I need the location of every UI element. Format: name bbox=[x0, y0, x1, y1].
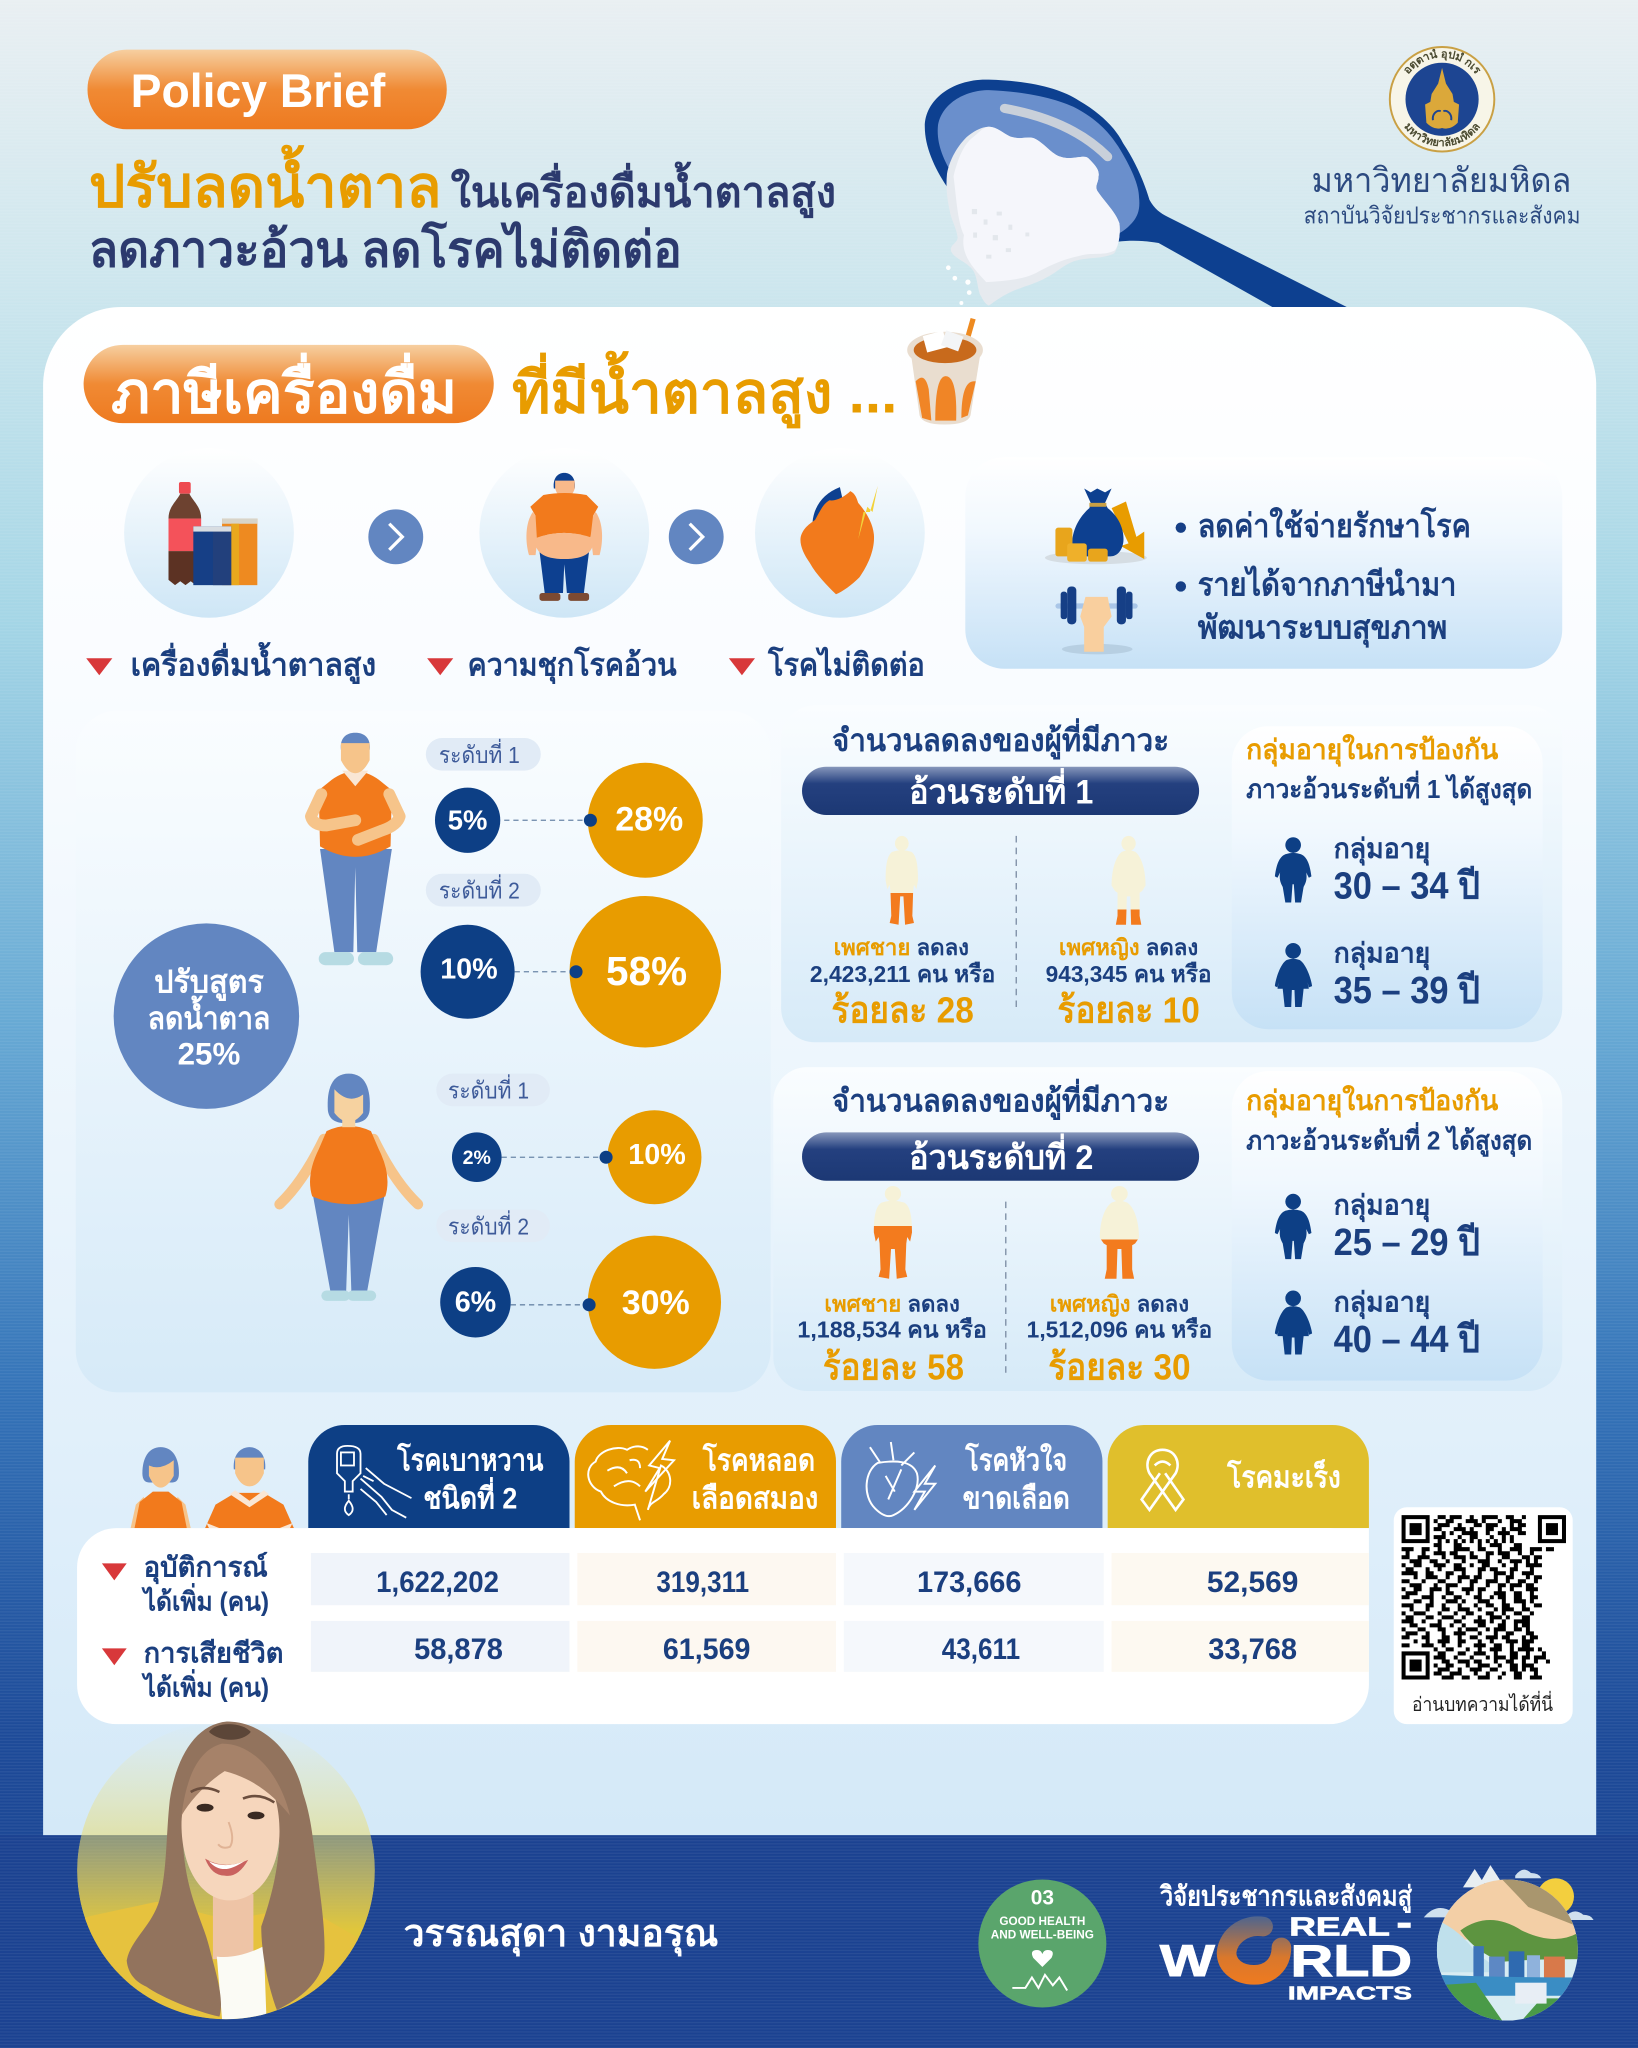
table tab: diabetes: โรคเบาหวาน bbox=[396, 1442, 544, 1478]
text: female level 2 result: 1,512,096 คน หรือ bbox=[1027, 1316, 1212, 1342]
title: ในเครื่องดื่มน้ำตาลสูง bbox=[451, 160, 836, 218]
table tab: ischemic heart disease: ขาดเลือด bbox=[963, 1483, 1070, 1516]
illustration: spoon with sugar bbox=[925, 80, 1347, 307]
QR code card bbox=[1394, 1507, 1573, 1724]
text: male level 2 result bbox=[797, 1291, 987, 1387]
badge: SDG 3: 03 bbox=[1031, 1886, 1054, 1909]
panel: age groups level 2: 40 – 44 ปี bbox=[1334, 1319, 1480, 1361]
author photo bbox=[77, 1721, 375, 2019]
row: mortality: 43,611 bbox=[942, 1633, 1020, 1666]
chart: female level 1 2 to 10 bbox=[452, 1110, 701, 1204]
table tab: ischemic heart disease bbox=[841, 1425, 1102, 1528]
text: male level 2 result: 1,188,534 คน หรือ bbox=[797, 1316, 987, 1342]
heading: beverage tax: ภาษีเครื่องดื่ม bbox=[111, 353, 457, 426]
arrow: obesity to NCDs bbox=[669, 509, 724, 564]
icon: brain with bolt bbox=[588, 1441, 674, 1520]
chain: NCD circle bbox=[755, 448, 925, 618]
row: incidence: 52,569 bbox=[1207, 1566, 1298, 1599]
text: male level 2 result: เพศชาย ลดลง bbox=[824, 1291, 960, 1316]
table tab: cancer: โรคมะเร็ง bbox=[1226, 1459, 1341, 1495]
heading: level 1 bbox=[802, 718, 1199, 815]
callout: 25 percent reformulation: ลดน้ำตาล bbox=[148, 995, 270, 1036]
logo: Mahidol University seal bbox=[1388, 46, 1496, 152]
icon: heart bbox=[800, 486, 878, 594]
text: male level 1 result: ร้อยละ 28 bbox=[831, 990, 974, 1031]
icon: bottle and cans bbox=[169, 482, 257, 585]
icon: anatomical heart bbox=[867, 1442, 935, 1516]
callout: 25 percent reformulation: ปรับสูตร bbox=[154, 965, 264, 1002]
logo: Real-World Impacts: REAL bbox=[1289, 1912, 1390, 1942]
chart: male level 2 10 to 58: 58% bbox=[606, 948, 687, 994]
badge: SDG 3: AND WELL-BEING bbox=[991, 1928, 1094, 1941]
panel: age groups level 2: กลุ่มอายุในการป้องกัน bbox=[1246, 1084, 1498, 1118]
row: incidence: 173,666 bbox=[917, 1566, 1021, 1599]
chart: female level 1 2 to 10: 10% bbox=[628, 1139, 686, 1171]
icon: money bag and coins bbox=[1045, 488, 1147, 564]
panel: age groups level 1: กลุ่มอายุ bbox=[1334, 833, 1430, 866]
panel: age groups level 2: กลุ่มอายุ bbox=[1334, 1286, 1430, 1319]
row: incidence: อุบัติการณ์ bbox=[144, 1551, 268, 1584]
author name: วรรณสุดา งามอรุณ bbox=[404, 1913, 718, 1957]
footer band bbox=[0, 1835, 1638, 2048]
title: ปรับลดน้ำตาล bbox=[89, 144, 442, 219]
chart: male level 1 5 to 28 bbox=[435, 763, 703, 878]
callout: 25 percent reformulation: 25% bbox=[178, 1036, 240, 1071]
heading: level 2: จำนวนลดลงของผู้ที่มีภาวะ bbox=[832, 1079, 1169, 1121]
heading: level 1: จำนวนลดลงของผู้ที่มีภาวะ bbox=[832, 718, 1169, 760]
logo: Real-World Impacts: W bbox=[1160, 1937, 1215, 1986]
arrow: drinks to obesity bbox=[368, 509, 423, 564]
icon: female silhouette level 2 bbox=[1100, 1186, 1139, 1279]
icon: hand lifting dumbbell bbox=[1055, 586, 1138, 654]
callout: 25 percent reformulation bbox=[114, 923, 299, 1109]
text: benefit 2 bbox=[1176, 566, 1456, 649]
pill: male level 2 bbox=[426, 874, 541, 906]
logo: Mahidol University seal: อตฺตานํ อุปมํ กเร bbox=[1404, 48, 1480, 74]
text: male level 1 result bbox=[810, 935, 995, 1031]
chart: female level 1 2 to 10: 2% bbox=[463, 1147, 491, 1169]
QR code card: อ่านบทความได้ที่นี่ bbox=[1412, 1691, 1553, 1716]
pill: female level 1: ระดับที่ 1 bbox=[448, 1073, 529, 1103]
row: mortality: 33,768 bbox=[1208, 1633, 1297, 1666]
icon: ribbon bbox=[1142, 1450, 1183, 1510]
chain: obesity circle bbox=[479, 448, 649, 618]
chart: male level 2 10 to 58: 10% bbox=[440, 953, 498, 985]
pill: male level 1 bbox=[426, 738, 541, 771]
text: benefit 1: ลดค่าใช้จ่ายรักษาโรค bbox=[1198, 506, 1471, 544]
panel: age groups level 2: กลุ่มอายุ bbox=[1334, 1190, 1430, 1223]
text: female level 2 result bbox=[1027, 1291, 1212, 1387]
row: incidence: ได้เพิ่ม (คน) bbox=[141, 1582, 269, 1616]
illustration: woman bbox=[280, 1074, 418, 1301]
row: mortality: การเสียชีวิต bbox=[144, 1638, 283, 1669]
panel: main content bbox=[43, 307, 1596, 1835]
illustration: globe of society bbox=[1424, 1865, 1594, 2021]
illustration: couple above table bbox=[131, 1447, 294, 1528]
labels: decreases chain bbox=[86, 641, 925, 684]
table tab: ischemic heart disease: โรคหัวใจ bbox=[964, 1442, 1067, 1478]
panel: age groups level 1 bbox=[1232, 726, 1543, 1029]
logo: Mahidol University seal: มหาวิทยาลัยมหิดล bbox=[1404, 123, 1480, 146]
row: incidence: 1,622,202 bbox=[376, 1566, 499, 1599]
icon: female silhouette level 1 bbox=[1112, 836, 1146, 925]
badge: SDG 3 bbox=[978, 1880, 1106, 2008]
panel: age groups level 1: ภาวะอ้วนระดับที่ 1 ได้สูงสุด bbox=[1246, 770, 1532, 806]
chain: high-sugar drinks circle bbox=[124, 448, 294, 618]
table tab: stroke: เลือดสมอง bbox=[692, 1483, 818, 1516]
text: benefit 2: พัฒนาระบบสุขภาพ bbox=[1198, 609, 1447, 649]
labels: decreases chain: โรคไม่ติดต่อ bbox=[767, 645, 925, 682]
policy brief badge: Policy Brief bbox=[131, 64, 386, 117]
icon: male silhouette level 2 bbox=[874, 1186, 912, 1279]
text: female level 1 result: 943,345 คน หรือ bbox=[1046, 961, 1212, 987]
chart: female level 2 6 to 30: 30% bbox=[622, 1284, 690, 1322]
panel: obesity level 1 bbox=[781, 705, 1562, 1042]
text: male level 1 result: 2,423,211 คน หรือ bbox=[810, 961, 995, 987]
icon: QR code bbox=[1402, 1515, 1566, 1680]
panel: benefits bbox=[965, 457, 1562, 669]
text: male level 1 result: เพศชาย ลดลง bbox=[834, 935, 969, 960]
table tab: diabetes: ชนิดที่ 2 bbox=[423, 1477, 517, 1516]
labels: decreases chain: เครื่องดื่มน้ำตาลสูง bbox=[131, 641, 376, 684]
row: mortality: 58,878 bbox=[414, 1633, 503, 1666]
panel: age groups level 1: กลุ่มอายุในการป้องกัน bbox=[1246, 733, 1498, 767]
table tab: diabetes bbox=[308, 1425, 570, 1528]
text: male level 2 result: ร้อยละ 58 bbox=[823, 1346, 964, 1387]
pill: female level 2: ระดับที่ 2 bbox=[448, 1209, 529, 1239]
panel: age groups level 2 bbox=[1232, 1071, 1543, 1381]
icon: glucose meter and hand bbox=[337, 1446, 411, 1518]
text: benefit 2: รายได้จากภาษีนำมา bbox=[1198, 566, 1456, 603]
panel: age groups level 1: 30 – 34 ปี bbox=[1334, 866, 1480, 908]
illustration: man bbox=[311, 733, 400, 965]
table tab: cancer bbox=[1108, 1425, 1369, 1528]
pill: male level 1: ระดับที่ 1 bbox=[439, 738, 520, 768]
table: incidence and mortality bbox=[77, 1528, 1369, 1724]
text: female level 2 result: เพศหญิง ลดลง bbox=[1050, 1291, 1189, 1317]
text: female level 2 result: ร้อยละ 30 bbox=[1048, 1346, 1191, 1387]
row: incidence bbox=[102, 1551, 1369, 1616]
heading: beverage tax: ที่มีน้ำตาลสูง ... bbox=[512, 351, 897, 429]
row: mortality bbox=[102, 1621, 1369, 1703]
row: mortality: 61,569 bbox=[663, 1633, 750, 1666]
heading: beverage tax bbox=[84, 345, 897, 429]
heading: level 2: อ้วนระดับที่ 2 bbox=[909, 1133, 1093, 1177]
institution name: มหาวิทยาลัยมหิดล bbox=[1311, 162, 1571, 200]
icon: obese man bbox=[526, 473, 602, 601]
panel: reformulation scenario bbox=[76, 711, 771, 1392]
institution name bbox=[1304, 162, 1581, 228]
chart: male level 1 5 to 28: 28% bbox=[615, 801, 683, 839]
pill: female level 2 bbox=[436, 1209, 550, 1242]
chart: female level 2 6 to 30 bbox=[440, 1236, 721, 1369]
panel: obesity level 2 bbox=[773, 1067, 1562, 1391]
heading: level 1: อ้วนระดับที่ 1 bbox=[909, 767, 1093, 811]
panel: age groups level 1: 35 – 39 ปี bbox=[1334, 970, 1480, 1012]
chart: male level 1 5 to 28: 5% bbox=[448, 804, 487, 835]
text: female level 1 result bbox=[1046, 935, 1212, 1031]
panel: age groups level 1: กลุ่มอายุ bbox=[1334, 938, 1430, 971]
institution name: สถาบันวิจัยประชากรและสังคม bbox=[1304, 202, 1581, 228]
chart: male level 2 10 to 58 bbox=[421, 896, 721, 1048]
policy brief badge bbox=[88, 50, 447, 129]
icon: male silhouette level 1 bbox=[886, 836, 918, 925]
chart: female level 2 6 to 30: 6% bbox=[455, 1286, 496, 1318]
pill: female level 1 bbox=[436, 1073, 550, 1106]
title: ลดภาวะอ้วน ลดโรคไม่ติดต่อ bbox=[89, 219, 682, 277]
panel: age groups level 2: 25 – 29 ปี bbox=[1334, 1222, 1480, 1264]
icon: iced drink cup bbox=[907, 319, 983, 424]
logo: Real-World Impacts: RLD bbox=[1291, 1937, 1412, 1986]
row: incidence: 319,311 bbox=[656, 1566, 749, 1599]
logo: Real-World Impacts: วิจัยประชากรและสังคมสู่ bbox=[1159, 1881, 1412, 1914]
table tab: stroke bbox=[575, 1425, 836, 1528]
panel: age groups level 2: ภาวะอ้วนระดับที่ 2 ได้สูงสุด bbox=[1246, 1121, 1532, 1157]
pill: male level 2: ระดับที่ 2 bbox=[439, 874, 520, 904]
title bbox=[89, 144, 836, 277]
text: female level 1 result: เพศหญิง ลดลง bbox=[1059, 935, 1198, 961]
badge: SDG 3: GOOD HEALTH bbox=[999, 1915, 1085, 1928]
labels: decreases chain: ความชุกโรคอ้วน bbox=[468, 645, 677, 684]
heading: level 2 bbox=[802, 1079, 1199, 1181]
row: mortality: ได้เพิ่ม (คน) bbox=[141, 1669, 269, 1703]
table tab: stroke: โรคหลอด bbox=[702, 1442, 815, 1478]
text: female level 1 result: ร้อยละ 10 bbox=[1057, 990, 1200, 1031]
logo: Real-World Impacts bbox=[1159, 1881, 1412, 2004]
logo: Real-World Impacts: IMPACTS bbox=[1288, 1983, 1412, 2004]
